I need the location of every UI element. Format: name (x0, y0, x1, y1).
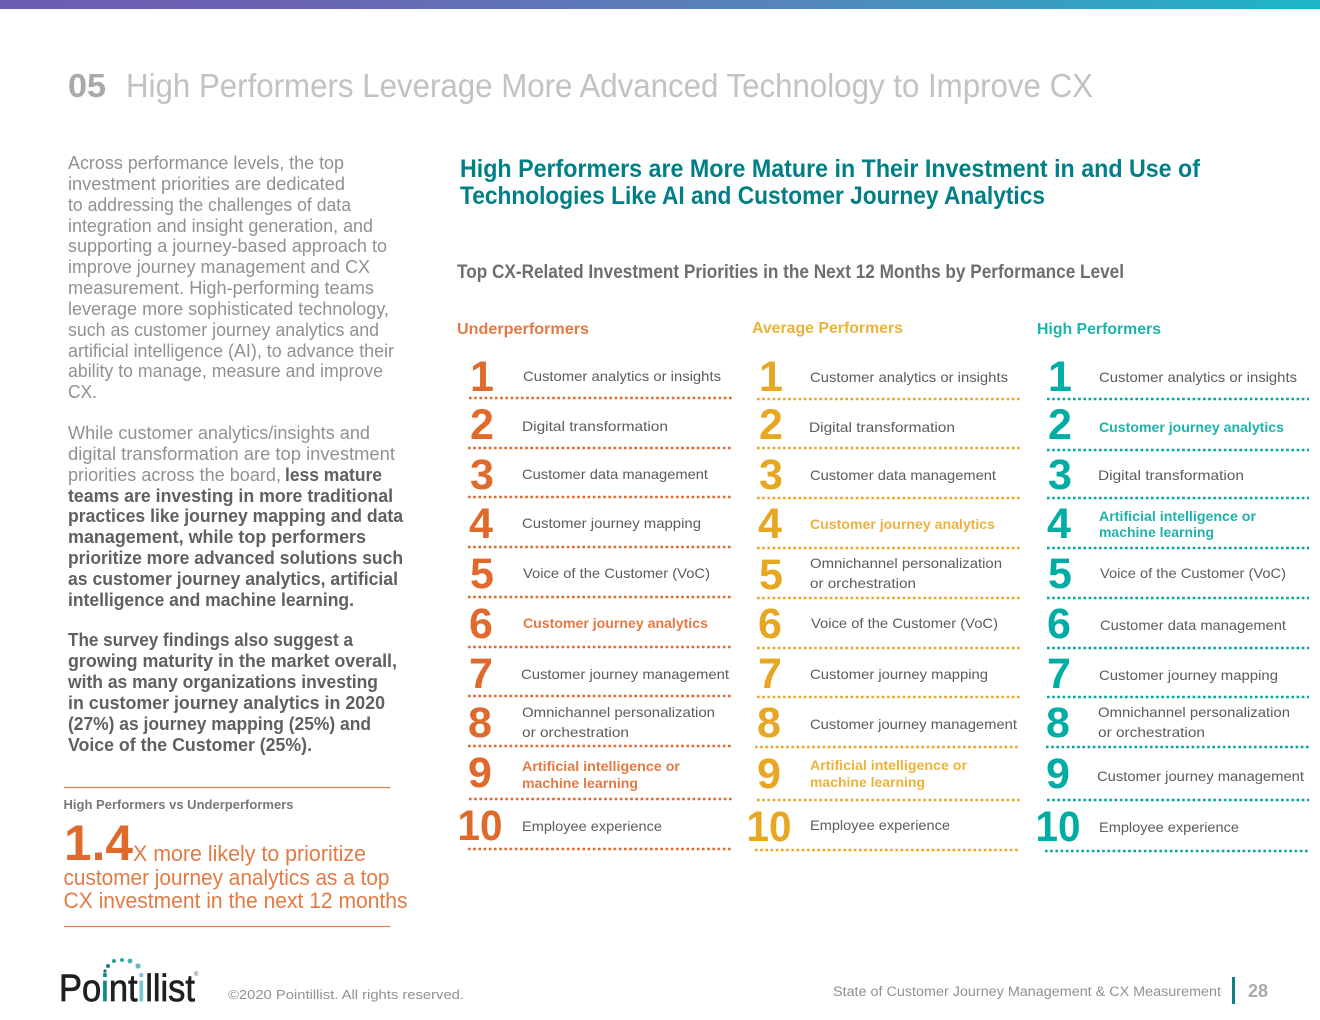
left column intro paragraph: such as customer journey analytics and (68, 319, 379, 340)
ranks: average performers: 4 (758, 500, 782, 548)
left column intro paragraph: supporting a journey-based approach to (68, 235, 387, 256)
items: average performers: Customer analytics or insights (810, 369, 1008, 385)
items: average performers: Artificial intelligence or (810, 757, 968, 773)
left column intro paragraph: to addressing the challenges of data (68, 194, 352, 215)
ranks: high performers: 1 (1048, 353, 1072, 401)
left column second paragraph: While customer analytics/insights and (68, 422, 370, 443)
items: high performers: Customer journey management (1097, 768, 1304, 784)
left column third paragraph: with as many organizations investing (67, 671, 378, 692)
items: high performers: or orchestration (1098, 724, 1205, 740)
items: average performers: Customer data management (810, 467, 996, 483)
items: average performers: Omnichannel personalization (810, 555, 1002, 571)
items: underperformers: Employee experience (522, 818, 662, 834)
ranks: high performers: 3 (1048, 451, 1072, 499)
left column second paragraph (68, 422, 404, 610)
left column second paragraph: management, while top performers (68, 526, 366, 547)
left column intro paragraph: integration and insight generation, and (68, 215, 373, 236)
callout: 1.4X more likely: CX investment in the next 12 months (64, 888, 408, 913)
items: average performers: Customer journey mapping (810, 666, 988, 682)
left column second paragraph: as customer journey analytics, artificial (68, 568, 398, 589)
left column second paragraph: prioritize more advanced solutions such (68, 547, 403, 568)
page title: High Performers Leverage More Advanced Technology to Improve CX (126, 67, 1093, 104)
items: underperformers: Digital transformation (522, 418, 668, 434)
items: average performers: or orchestration (810, 575, 916, 591)
left column third paragraph: in customer journey analytics in 2020 (68, 692, 385, 713)
column heading: average performers: Average Performers (752, 320, 903, 337)
left column third paragraph: growing maturity in the market overall, (68, 650, 397, 671)
ranks: underperformers (458, 353, 502, 850)
items: average performers: Digital transformation (809, 419, 955, 435)
ranks: high performers: 2 (1048, 401, 1072, 449)
items: average performers: Voice of the Customer (VoC) (811, 615, 998, 631)
ranks: high performers: 4 (1047, 500, 1071, 548)
left column intro paragraph: leverage more sophisticated technology, (68, 298, 389, 319)
callout: 1.4X more likely: High Performers vs Underperformers (64, 797, 294, 812)
ranks: high performers: 10 (1036, 803, 1080, 851)
logo: Pointillist: Pointillist (59, 968, 195, 1010)
items: high performers: machine learning (1099, 524, 1214, 540)
left column third paragraph (67, 629, 397, 755)
footer divider (1232, 977, 1235, 1004)
column heading: underperformers: Underperformers (457, 321, 589, 338)
left column second paragraph: teams are investing in more traditional (68, 485, 393, 506)
left column intro paragraph: Across performance levels, the top (68, 152, 344, 173)
ranks: underperformers: 2 (470, 401, 494, 449)
left column third paragraph: The survey findings also suggest a (68, 629, 354, 650)
left column intro paragraph: improve journey management and CX (68, 256, 370, 277)
ranks: average performers: 1 (759, 353, 783, 401)
ranks: average performers: 9 (757, 750, 781, 798)
left column second paragraph: practices like journey mapping and data (68, 505, 404, 526)
left column second paragraph: digital transformation are top investment (68, 443, 395, 464)
items: high performers: Artificial intelligence or (1099, 508, 1257, 524)
ranks: average performers: 10 (746, 803, 792, 851)
ranks: underperformers: 4 (469, 500, 493, 548)
left column second paragraph: intelligence and machine learning. (68, 589, 354, 610)
items: underperformers: or orchestration (522, 724, 629, 740)
items: high performers: Digital transformation (1098, 467, 1244, 483)
left column intro paragraph: ability to manage, measure and improve (68, 360, 383, 381)
items: underperformers: Customer journey management (521, 666, 729, 682)
column: average performers (746, 320, 1021, 851)
ranks: underperformers: 6 (469, 600, 493, 648)
ranks: average performers: 6 (758, 600, 782, 648)
ranks: underperformers: 5 (470, 550, 494, 598)
items: underperformers (521, 368, 729, 834)
items: high performers: Customer analytics or insights (1099, 369, 1297, 385)
left column intro paragraph: CX. (68, 381, 97, 402)
items: underperformers: Customer journey mapping (522, 515, 701, 531)
ranks: average performers: 2 (759, 401, 783, 449)
footer report title: State of Customer Journey Management & CX Measurement (833, 984, 1221, 999)
page title: 05 (68, 67, 106, 104)
callout: 1.4X more likely: 1.4 (64, 815, 133, 871)
main heading (460, 155, 1201, 210)
items: underperformers: Customer analytics or insights (523, 368, 721, 384)
items: average performers: Customer journey management (810, 716, 1017, 732)
chart subtitle: Top CX-Related Investment Priorities in the Next 12 Months by Performance Level (457, 262, 1124, 283)
items: average performers (809, 369, 1017, 833)
copyright: ©2020 Pointillist. All rights reserved. (228, 987, 464, 1002)
ranks: high performers: 8 (1046, 699, 1070, 747)
items: high performers: Omnichannel personalization (1098, 704, 1290, 720)
left column second paragraph: priorities across the board, (68, 464, 281, 485)
ranks: average performers: 7 (758, 650, 782, 698)
items: high performers: Customer journey mapping (1099, 667, 1278, 683)
column: high performers (1036, 321, 1309, 851)
items: average performers: machine learning (810, 774, 925, 790)
ranks: average performers (746, 353, 792, 851)
top gradient bar (0, 0, 1320, 9)
main heading: Technologies Like AI and Customer Journey Analytics (460, 182, 1045, 210)
left column intro paragraph: investment priorities are dedicated (68, 173, 345, 194)
left column third paragraph: Voice of the Customer (25%). (68, 734, 312, 755)
left column intro paragraph (68, 152, 394, 402)
ranks: underperformers: 8 (468, 699, 492, 747)
items: underperformers: Artificial intelligence or (522, 758, 681, 774)
ranks: underperformers: 3 (470, 451, 494, 499)
items: underperformers: Customer journey analytics (523, 615, 708, 631)
ranks: underperformers: 10 (458, 802, 502, 850)
items: high performers: Voice of the Customer (VoC) (1100, 565, 1286, 581)
ranks: high performers: 9 (1046, 750, 1070, 798)
items: underperformers: Voice of the Customer (VoC) (523, 565, 710, 581)
items: underperformers: Omnichannel personalization (522, 704, 715, 720)
left column intro paragraph: artificial intelligence (AI), to advance their (68, 340, 394, 361)
callout: 1.4X more likely: X more likely to prioritize (133, 841, 366, 866)
ranks: high performers: 6 (1047, 600, 1071, 648)
items: high performers (1097, 369, 1304, 835)
left column second paragraph: less mature (285, 464, 382, 485)
ranks: average performers: 5 (759, 551, 783, 599)
left column intro paragraph: measurement. High-performing teams (68, 277, 374, 298)
ranks: average performers: 3 (759, 451, 783, 499)
callout: 1.4X more likely (64, 788, 408, 926)
items: average performers: Employee experience (810, 817, 950, 833)
page number: 28 (1248, 981, 1268, 1001)
ranks: underperformers: 7 (469, 650, 493, 698)
items: high performers: Employee experience (1099, 819, 1239, 835)
ranks: high performers (1036, 353, 1080, 851)
items: high performers: Customer journey analytics (1099, 419, 1284, 435)
column heading: high performers: High Performers (1037, 321, 1161, 338)
left column third paragraph: (27%) as journey mapping (25%) and (68, 713, 371, 734)
items: underperformers: Customer data management (522, 466, 708, 482)
items: high performers: Customer data management (1100, 617, 1286, 633)
column: underperformers (457, 321, 732, 850)
ranks: high performers: 7 (1047, 650, 1071, 698)
main heading: High Performers are More Mature in Their Investment in and Use of (460, 155, 1201, 183)
items: average performers: Customer journey analytics (810, 516, 995, 532)
ranks: average performers: 8 (757, 699, 781, 747)
callout: 1.4X more likely: customer journey analytics as a top (64, 865, 390, 890)
ranks: underperformers: 1 (470, 353, 494, 401)
logo: Pointillist: ® (194, 971, 199, 978)
ranks: underperformers: 9 (468, 749, 492, 797)
ranks: high performers: 5 (1048, 550, 1072, 598)
items: underperformers: machine learning (522, 775, 638, 791)
